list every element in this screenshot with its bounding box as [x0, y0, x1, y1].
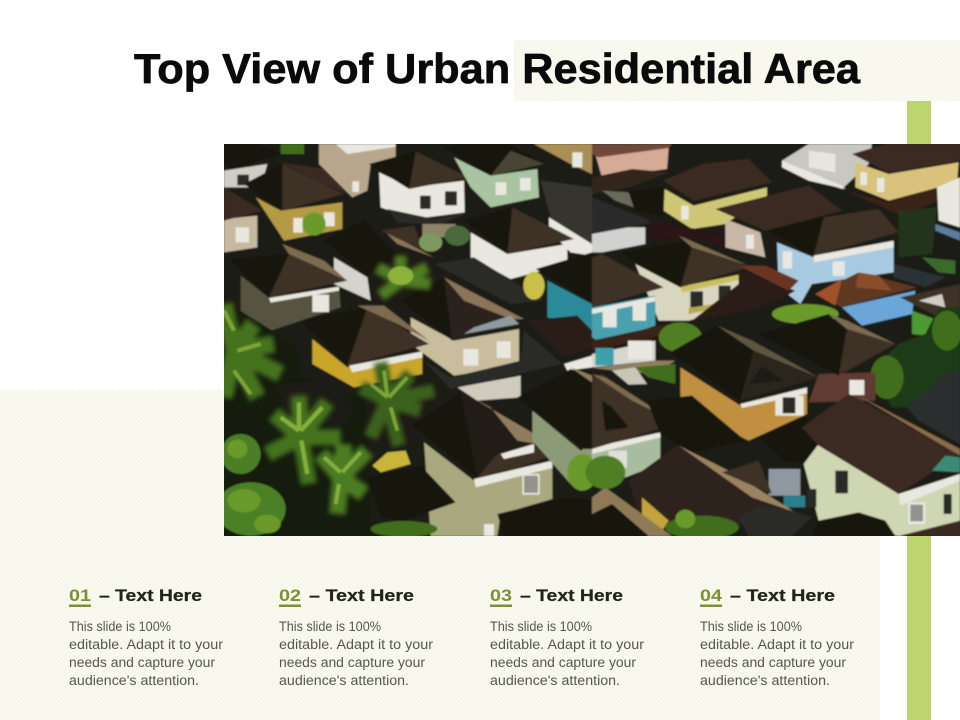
- heading 02: – Text Here: [309, 586, 414, 605]
- heading 03: – Text Here: [520, 586, 623, 605]
- body text 02: This slide is 100%: [279, 619, 381, 634]
- background panel: left block: [0, 390, 224, 720]
- underline 01: [69, 604, 91, 607]
- photo: aerial view of houses: [224, 144, 960, 536]
- body text 04: audience's attention.: [700, 673, 830, 688]
- body text 01: editable. Adapt it to your: [69, 637, 224, 652]
- background panel: bottom block: [224, 536, 880, 720]
- body text 01: needs and capture your: [69, 655, 216, 670]
- body text 03: needs and capture your: [490, 655, 637, 670]
- column 3: [490, 586, 645, 688]
- number 02: 02: [279, 586, 301, 605]
- body text 03: audience's attention.: [490, 673, 620, 688]
- title: Top View of Urban Residential Area: [134, 45, 861, 92]
- body text 03: This slide is 100%: [490, 619, 592, 634]
- underline 02: [279, 604, 301, 607]
- body text 01: audience's attention.: [69, 673, 199, 688]
- photo left half: [216, 144, 597, 537]
- heading 04: – Text Here: [730, 586, 835, 605]
- body text 04: needs and capture your: [700, 655, 847, 670]
- number 04: 04: [700, 586, 723, 605]
- body text 01: This slide is 100%: [69, 619, 171, 634]
- background panel: title band: [514, 40, 960, 101]
- body text 03: editable. Adapt it to your: [490, 637, 645, 652]
- body text 02: audience's attention.: [279, 673, 409, 688]
- body text 04: This slide is 100%: [700, 619, 802, 634]
- column 2: [279, 586, 434, 688]
- number 03: 03: [490, 586, 512, 605]
- column 4: [700, 586, 855, 688]
- green accent bar: upper: [907, 101, 931, 144]
- number 01: 01: [69, 586, 91, 605]
- green accent bar: lower: [907, 536, 931, 720]
- body text 04: editable. Adapt it to your: [700, 637, 855, 652]
- column 1: [69, 586, 224, 688]
- body text 02: needs and capture your: [279, 655, 426, 670]
- body text 02: editable. Adapt it to your: [279, 637, 434, 652]
- underline 04: [700, 604, 722, 607]
- heading 01: – Text Here: [99, 586, 202, 605]
- underline 03: [490, 604, 512, 607]
- photo right half: [585, 144, 960, 539]
